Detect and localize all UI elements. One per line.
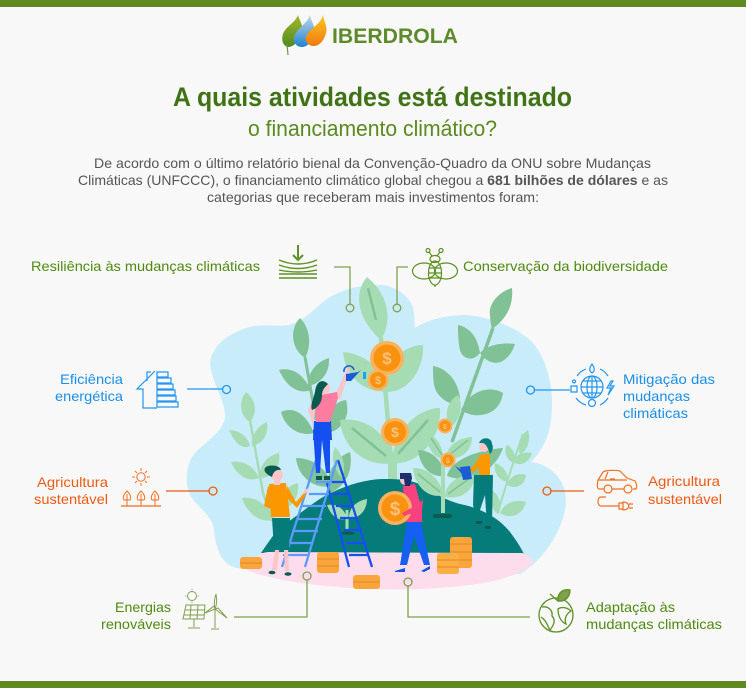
label: mitigação: mudanças [623,388,690,404]
intro paragraph: categorias que receberam mais investimentos foram: [207,189,539,205]
intro paragraph [78,155,668,205]
plant: right lower [413,433,503,518]
plant: far right light [490,430,532,516]
label: mitigação [623,371,715,421]
central illustration [187,277,566,589]
plant: far left light [229,392,298,522]
label: energias renováveis: Energias [115,599,171,615]
icon: sun and crops [121,468,161,506]
label: eficiência energética: Eficiência [60,371,123,387]
man carrying coin [378,473,430,572]
logo: Iberdrola [282,15,458,55]
icon: earth with leaf [539,590,573,632]
teal hill [261,479,524,554]
label: agricultura sustentável right: sustentável [648,491,722,507]
label: eficiência energética: energética [55,388,123,404]
plant: left dark [279,318,347,434]
title: A quais atividades está destinado [173,82,572,112]
plant: right tall dark [433,288,515,442]
top bar [0,0,746,7]
label: energias renováveis [101,599,171,632]
label: mitigação: Mitigação das [623,371,715,387]
coins on plants: $ [391,424,399,440]
plant: small on hill [327,499,367,535]
label: agricultura sustentável left [34,474,108,507]
intro paragraph: Climáticas (UNFCCC), o financiamento climático global chegou a 681 bilhões de dólares e as [78,172,668,188]
icon: soil layers with arrow [279,245,317,278]
woman watering on right [455,438,493,529]
pink ground [247,552,533,589]
coins on plants: $ [443,424,447,431]
plants behind ladder [296,447,351,494]
label: adaptação: mudanças climáticas [586,616,722,632]
coins on plants [368,341,456,468]
label: conservação: Conservação da biodiversidade [463,258,668,274]
label: agricultura sustentável left: sustentável [34,491,108,507]
label: agricultura sustentável right [648,473,722,507]
plant: tall central [343,277,423,470]
coins on plants: $ [375,375,381,387]
label: mitigação: climáticas [623,405,688,421]
icon: globe with cycle [571,364,614,406]
label: resiliência: Resiliência às mudanças climáticas [31,258,260,274]
coins on plants: $ [382,349,392,368]
connector lines and dots [166,267,584,617]
label: eficiência energética [55,371,123,404]
icon: bee [412,248,458,287]
icon: solar panel and wind turbine [183,589,227,629]
label: agricultura sustentável left: Agricultura [37,474,108,490]
man carrying coin: $ [390,499,401,520]
coin stacks [240,537,472,589]
plant: lower central [340,408,440,495]
title [173,82,572,141]
label: adaptação [586,599,722,632]
label: energias renováveis: renováveis [101,616,171,632]
woman with orange shirt [264,466,309,576]
icon: electric car [597,470,637,510]
title: o financiamento climático? [248,116,497,141]
light blue blob background [187,285,566,575]
icon: house with energy bars [137,371,178,408]
coins on plants: $ [446,458,450,465]
ladder [282,460,372,567]
logo: Iberdrola: IBERDROLA [332,25,458,48]
bottom bar [0,681,746,688]
label: adaptação: Adaptação às [586,599,675,615]
label: agricultura sustentável right: Agricultura [648,473,720,489]
woman on ladder [308,366,366,480]
intro paragraph: De acordo com o último relatório bienal da Convenção-Quadro da ONU sobre Mudanças [94,155,651,171]
